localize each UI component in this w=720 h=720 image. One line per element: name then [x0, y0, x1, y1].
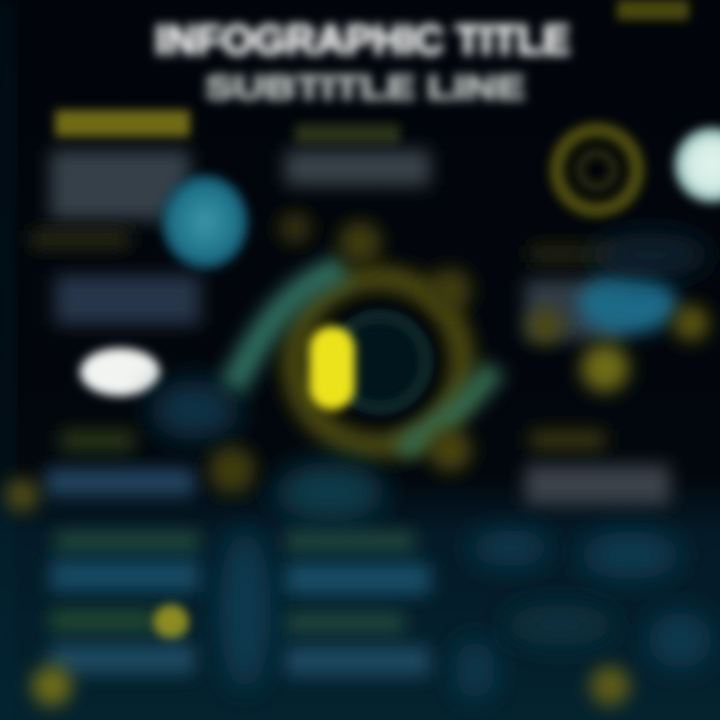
- text block: bottom centre two: [285, 646, 430, 676]
- gear tooth lower right: [428, 428, 472, 472]
- icon: yellow dot: [581, 344, 629, 392]
- text block: lower right: [525, 465, 670, 505]
- icon: teal planet: [161, 174, 249, 270]
- heading: bottom left two: [50, 610, 155, 632]
- gear tooth lower left: [208, 446, 256, 494]
- text block: lower left: [45, 468, 195, 496]
- title: [155, 16, 570, 107]
- heading: upper centre: [295, 124, 400, 144]
- heading: middle left: [30, 230, 130, 248]
- heading: upper left: [55, 110, 190, 137]
- heading: bottom centre two: [285, 613, 405, 633]
- panel: lower left: [5, 430, 195, 512]
- text block: bottom left one: [50, 560, 200, 592]
- icon: blue ellipse: [578, 274, 678, 334]
- panel: middle left: [30, 230, 240, 440]
- glow: bottom middle: [219, 530, 271, 690]
- glow: pattern two: [580, 531, 680, 579]
- glow: pattern three: [505, 605, 615, 645]
- icon: white ellipse: [80, 348, 160, 396]
- icon: olive ring: [557, 130, 637, 210]
- glow: blue patch: [150, 380, 240, 440]
- panel: upper left: [50, 110, 190, 220]
- chart: central gear diagram: [208, 211, 495, 522]
- heading: bottom left one: [55, 532, 200, 552]
- icon: olive dot right: [673, 305, 709, 341]
- heading: right column: [530, 245, 615, 263]
- panel: lower right: [525, 430, 670, 505]
- text block: bottom centre one: [285, 563, 430, 595]
- glow: dark teal: [590, 233, 710, 277]
- gear tooth top: [338, 221, 382, 265]
- text block: middle left: [55, 275, 200, 325]
- yellow capsule: [309, 326, 355, 410]
- icon: small olive dot: [5, 478, 39, 512]
- text block: bottom left two: [50, 644, 195, 674]
- title: INFOGRAPHIC TITLE: [155, 16, 570, 63]
- icon: bottom right yellow dot: [590, 666, 630, 706]
- green arc left: [232, 268, 345, 388]
- glow: pattern five: [455, 640, 495, 700]
- icon: yellow dot: [153, 604, 189, 640]
- gear tooth upper right: [428, 268, 472, 312]
- icon: olive dot left: [528, 309, 562, 343]
- text block: upper left: [50, 150, 190, 220]
- glow: pattern four: [648, 612, 712, 668]
- heading: lower left: [60, 430, 135, 452]
- green arc right: [400, 368, 495, 450]
- icon: bottom yellow dot: [32, 666, 72, 706]
- panel: upper centre: [285, 124, 430, 186]
- inner teal ring: [334, 316, 426, 408]
- panel: bottom right pattern: [219, 530, 712, 706]
- gear ring: [294, 278, 462, 446]
- title: SUBTITLE LINE: [205, 69, 525, 107]
- panel: bottom centre column: [285, 532, 430, 676]
- icon: pale moon: [674, 127, 720, 203]
- heading: lower right: [530, 430, 605, 450]
- glow: pattern one: [470, 530, 550, 566]
- gear tooth upper left: [278, 211, 312, 245]
- text block: right column: [525, 280, 625, 340]
- teal base: [275, 462, 385, 522]
- text block: upper centre: [285, 150, 430, 186]
- heading: bottom centre one: [285, 532, 415, 552]
- panel: right column: [525, 233, 710, 392]
- top-right label: [617, 0, 689, 20]
- inner dark disc: [332, 314, 428, 410]
- left edge glow: [0, 0, 12, 720]
- panel: bottom left column: [32, 532, 200, 706]
